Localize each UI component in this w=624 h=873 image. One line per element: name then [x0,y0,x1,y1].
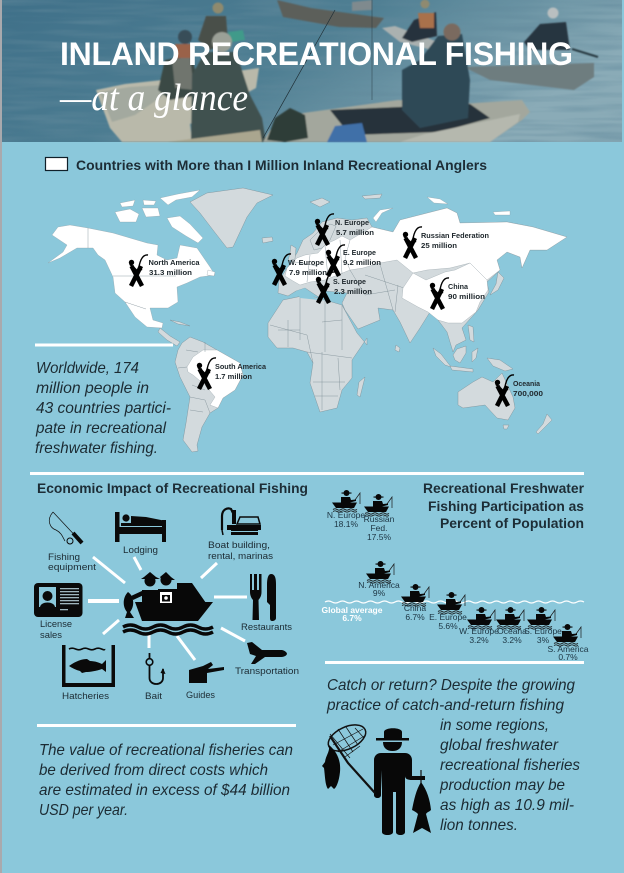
icon: hatchery tank [62,645,115,702]
Africa [268,295,367,412]
icon: angler with net and fish [322,720,431,835]
heading: participation: Recreational Freshwater [423,481,585,496]
subtitle: —at a glance [59,77,248,119]
icon: pointing hand / guides [186,662,224,701]
title: INLAND RECREATIONAL FISHING [60,36,573,72]
angler: Oceania [495,375,543,406]
Russian Fed. marker: Fed. [370,523,388,533]
angler: Russian Federation: 25 million [421,241,457,250]
text block: worldwide anglers: million people in [36,380,149,397]
N. Europe marker: N. Europe [327,510,365,520]
heading: participation [423,481,585,531]
China marker: China [404,603,426,613]
icon: knife and fork [241,574,292,633]
heading: participation: Percent of Population [440,516,584,531]
angler: China [430,278,485,309]
icon: central boat with anglers [123,572,213,634]
body [374,753,425,835]
angler: N. Europe [315,214,374,245]
Oceana marker: 3.2% [502,635,522,645]
foreground angler [191,52,266,142]
North America [48,225,215,328]
heading: participation: Fishing Participation as [428,499,584,514]
Russian Fed. marker [364,494,395,542]
Australia [458,373,515,420]
text block: value of fisheries: USD per year. [39,802,128,819]
S. America marker: 0.7% [558,652,578,662]
angler: E. Europe: 9.2 million [343,258,381,267]
text block: value of fisheries: are estimated in excess of $44 billion [39,782,290,799]
angler: North America: 31.3 million [149,268,192,277]
Greenland [190,188,273,248]
N. America marker: N. America [358,580,400,590]
N. Europe marker [327,490,365,529]
E. Europe marker: 5.6% [438,621,458,631]
angler: S. Europe [316,272,372,303]
China [402,263,488,323]
China marker: 6.7% [405,612,425,622]
N. America marker: 9% [373,588,386,598]
icon: airplane / transportation: Transportation [235,666,299,677]
angler: E. Europe: E. Europe [343,248,376,257]
connector rays [88,557,247,660]
icon: boat building [208,508,273,562]
angler: North America: North America [148,258,200,267]
angler: Russian Federation [403,227,489,258]
angler: E. Europe [326,245,381,276]
angler: Oceania: 700,000 [513,389,543,398]
Central America [158,328,180,346]
Russia white overlay [345,208,567,280]
Novaya Zemlya and Arctic islands [373,208,393,222]
top centre boat [277,0,384,28]
South America [175,337,243,452]
icon: pointing hand / guides: Guides [186,690,215,701]
Brazil [187,350,243,408]
central boat [263,100,530,142]
Europe white overlay [285,236,350,285]
angler: China: China [448,282,469,291]
hat and head [376,728,409,740]
N. America marker [358,561,400,598]
global average wave: Global average [322,605,383,615]
text block: value of fisheries [39,742,293,819]
S. America marker: S. America [547,644,589,654]
text block: catch or return: global freshwater [440,737,559,754]
text block: catch or return: production may be [439,777,565,794]
icon: licence card: License [40,619,72,630]
Mediterranean [296,288,338,302]
Russian Fed. marker: 17.5% [367,532,391,542]
right boat [464,63,594,90]
text block: catch or return: lion tonnes. [440,817,518,834]
S. Europe marker: 3% [537,635,550,645]
angler: S. Europe: S. Europe [333,277,366,286]
Eurasia base [278,208,567,352]
S. Europe marker: S. Europe [524,626,562,636]
E. Europe marker [429,592,467,631]
icon: fishing rod [48,512,96,573]
text block: value of fisheries: The value of recreational fisheries can [39,742,293,759]
big seated angler [402,34,470,128]
angler: S. Europe: 2.3 million [334,287,372,296]
icon: hatchery tank: Hatcheries [62,691,109,702]
text block: catch or return: in some regions, [440,717,549,734]
text block: worldwide anglers: 43 countries partici- [36,400,171,417]
S. Europe marker [524,607,562,645]
text block: catch or return [326,677,580,834]
angler: W. Europe: W. Europe [288,258,324,267]
icon: airplane / transportation [235,642,299,677]
Russian Fed. marker: Russian [364,514,395,524]
angler: Oceania: Oceania [513,379,541,388]
participation chart [322,490,589,662]
angler: W. Europe: 7.9 million [289,268,327,277]
angler: South America: South America [215,362,267,371]
E. Europe marker: E. Europe [429,612,467,622]
global average wave [322,601,584,623]
angler: North America [129,255,200,286]
global average wave: 6.7% [342,613,362,623]
icon: knife and fork: Restaurants [241,622,292,633]
China marker [401,584,429,622]
angler: South America [197,358,267,389]
icon: boat building: rental, marinas [208,551,273,562]
text block: worldwide anglers: Worldwide, 174 [36,360,139,377]
angler: South America: 1.7 million [215,372,252,381]
header photo: anglers in boats [2,0,622,142]
title [59,36,573,119]
world map [48,188,567,452]
text block: worldwide anglers [35,345,173,457]
back right boat with orange vest angler [382,26,440,52]
angler: China: 90 million [448,292,485,301]
Japan and Asian islands [490,272,504,295]
angler: N. Europe: 5.7 million [336,228,374,237]
heading: economic impact: Economic Impact of Recreational Fishing [37,481,308,496]
left white boat [96,68,259,142]
text block: catch or return: recreational fisheries [440,757,580,774]
angler: N. Europe: N. Europe [335,218,369,227]
angler: Russian Federation: Russian Federation [421,231,489,240]
Canadian Arctic islands [167,216,203,243]
icon: hook / bait: Bait [145,691,162,702]
text block: worldwide anglers: pate in recreational [35,420,166,437]
W. Europe marker [459,607,499,645]
hanging fish [420,770,422,783]
icon: hook / bait [145,653,166,702]
icon: fishing rod: Fishing [48,552,80,563]
Oceana marker [496,607,527,645]
text block: catch or return: as high as 10.9 mil- [440,797,574,814]
W. Europe marker: W. Europe [459,626,499,636]
icon: licence card [34,583,82,641]
text block: worldwide anglers: freshwater fishing. [35,440,158,457]
icon: bed / lodging [115,512,166,556]
left angler in vest [158,55,200,100]
S. America marker [547,624,589,662]
N. Europe marker: 18.1% [334,519,358,529]
W. Europe marker: 3.2% [469,635,489,645]
text block: value of fisheries: be derived from direct costs which [39,762,268,779]
landing net [324,720,370,756]
standing angler behind [198,16,228,50]
text block: catch or return: practice of catch-and-return fishing [326,697,564,714]
map legend: Countries with More than I Million Inland Recreational Anglers [76,158,487,173]
icon: fishing rod: equipment [48,562,96,573]
icon: licence card: sales [40,630,62,641]
angler: W. Europe [272,254,327,285]
economic impact diagram [34,508,299,702]
fish in net [322,745,340,789]
Oceana marker: Oceana [497,626,527,636]
icon: boat building: Boat building, [208,540,270,551]
icon: bed / lodging: Lodging [123,545,158,556]
text block: catch or return: Catch or return? Despite the growing [327,677,575,694]
